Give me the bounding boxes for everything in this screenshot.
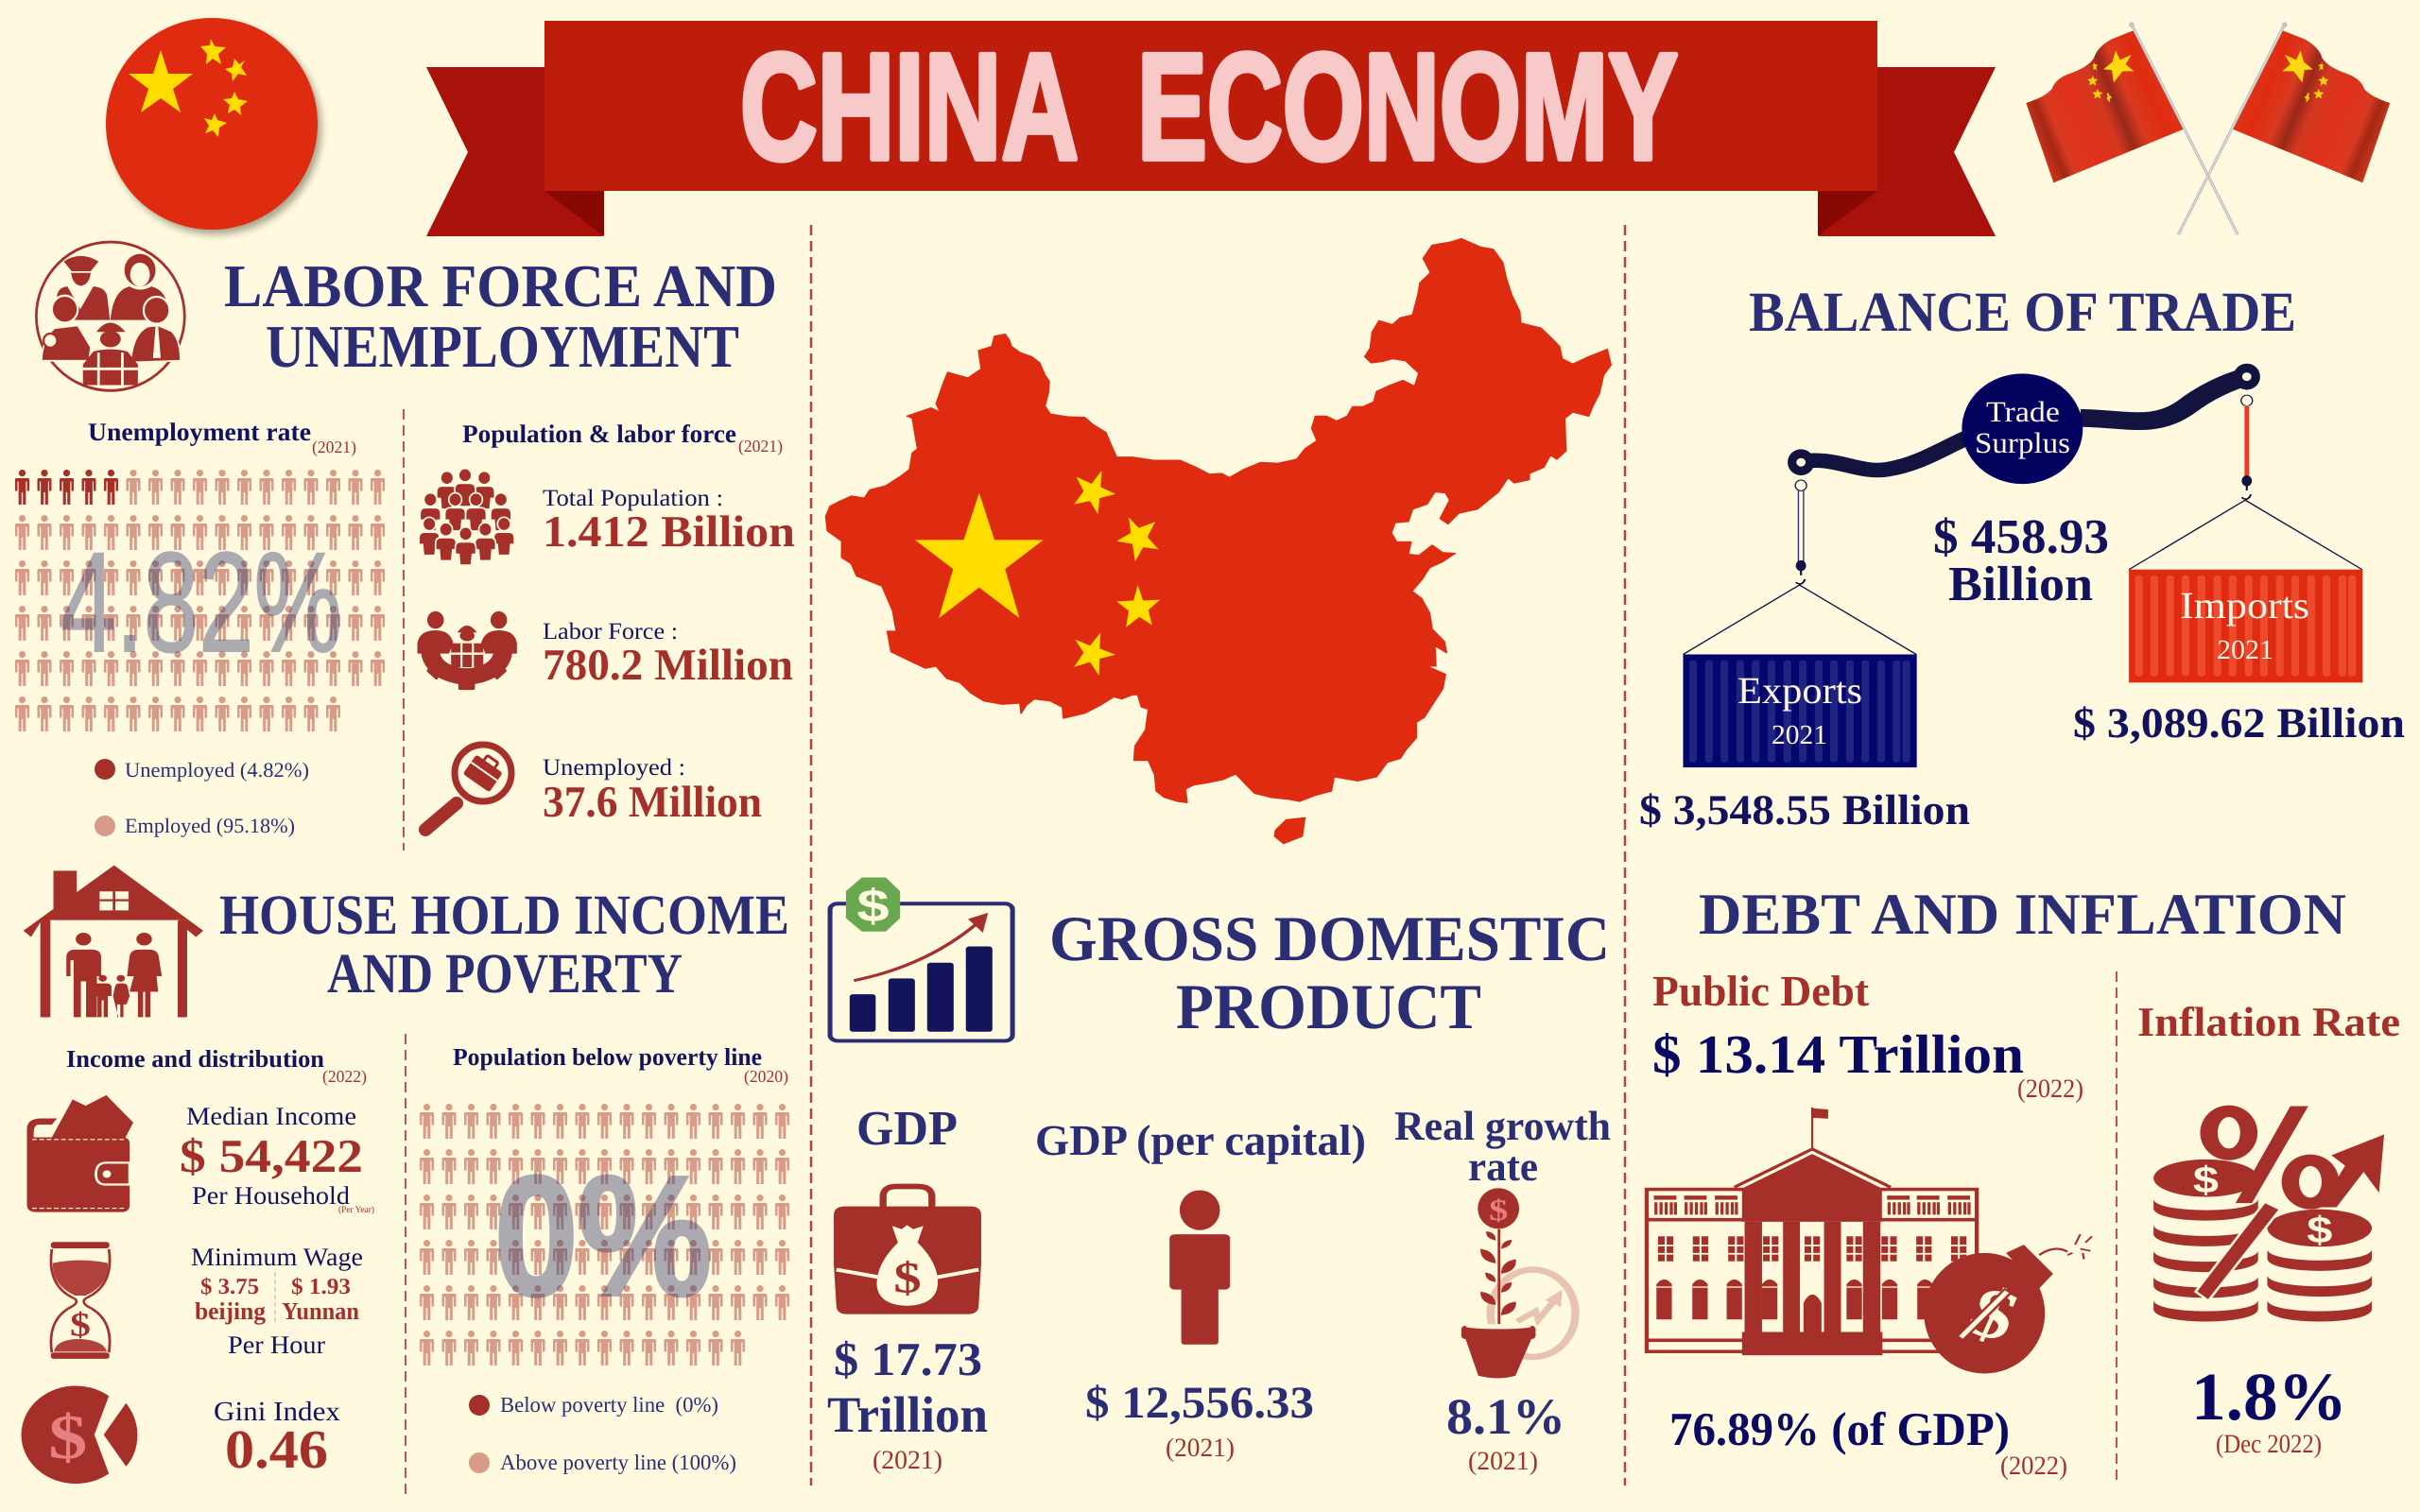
value: GDP per capita: $ 12,556.33 bbox=[1085, 1378, 1314, 1428]
stat: total population bbox=[543, 486, 795, 557]
icon: growth chart with dollar badge: $ bbox=[856, 881, 890, 932]
icon: hourglass bbox=[51, 1242, 110, 1359]
value: trade surplus bbox=[1933, 510, 2109, 611]
icon: government building with bomb: $ bbox=[1957, 1271, 2031, 1357]
value: debt to GDP: (2022) bbox=[2000, 1452, 2067, 1481]
subheading: population below poverty line: Population below poverty line bbox=[453, 1043, 762, 1071]
value: GDP: Trillion bbox=[827, 1386, 988, 1443]
stat: labor force: Labor Force : bbox=[543, 619, 678, 644]
stat: minimum wage: Yunnan bbox=[282, 1297, 360, 1325]
stat: median income: Median Income bbox=[186, 1102, 356, 1130]
heading: GROSS DOMESTIC bbox=[1049, 902, 1610, 974]
icon: briefcase with money bag bbox=[834, 1186, 981, 1314]
icon: magnifier with briefcase bbox=[425, 745, 511, 830]
title: CHINA bbox=[740, 22, 1079, 191]
value: inflation rate: 1.8% bbox=[2191, 1359, 2347, 1435]
label: inflation rate: Inflation Rate bbox=[2137, 999, 2400, 1045]
panel: balance of trade bbox=[1639, 281, 2405, 833]
icon: wallet bbox=[27, 1095, 133, 1212]
heading: UNEMPLOYMENT bbox=[266, 313, 739, 380]
section divider: main left bbox=[810, 225, 812, 1486]
stat: median income: $ 54,422 bbox=[180, 1129, 363, 1182]
value: GDP per capita: (2021) bbox=[1166, 1434, 1235, 1463]
stat: labor force bbox=[543, 619, 793, 690]
legend: above poverty line: Above poverty line (100%) bbox=[500, 1451, 736, 1474]
legend: employed: Employed (95.18%) bbox=[125, 814, 295, 837]
panel: household income and poverty bbox=[22, 866, 789, 1494]
heading: BALANCE OF TRADE bbox=[1749, 281, 2296, 343]
value: trade surplus: Billion bbox=[1948, 558, 2093, 611]
icon: coins with percent and arrow: $ bbox=[2307, 1210, 2332, 1251]
label: trade surplus: Trade bbox=[1986, 395, 2060, 428]
icon: briefcase with money bag: $ bbox=[893, 1253, 922, 1302]
heading: PRODUCT bbox=[1176, 971, 1481, 1042]
icon: person bbox=[1169, 1190, 1230, 1345]
pictogram: unemployment rate bbox=[15, 470, 385, 731]
panel: debt and inflation bbox=[1647, 883, 2400, 1484]
icon: house with family bbox=[24, 866, 203, 1017]
value: GDP: $ 17.73 bbox=[834, 1332, 982, 1385]
icon: round China flag bbox=[106, 18, 318, 230]
stat: gini index bbox=[214, 1397, 341, 1480]
value: public debt bbox=[1652, 1023, 2083, 1104]
icon: government building with bomb bbox=[1647, 1108, 2092, 1374]
value: exports: $ 3,548.55 Billion bbox=[1639, 786, 1970, 833]
value: GDP: (2021) bbox=[873, 1446, 942, 1475]
value: imports: $ 3,089.62 Billion bbox=[2073, 699, 2405, 747]
label: exports bbox=[1737, 669, 1862, 750]
heading bbox=[219, 884, 789, 1005]
label: real growth rate: Real growth bbox=[1394, 1103, 1611, 1149]
stat: minimum wage bbox=[191, 1243, 363, 1359]
subheading: population below poverty line: (2020) bbox=[744, 1067, 788, 1086]
value: trade surplus: $ 458.93 bbox=[1933, 510, 2109, 564]
pictogram: poverty bbox=[420, 1104, 789, 1366]
map of China with flag stars bbox=[826, 239, 1611, 844]
label: trade surplus: Surplus bbox=[1975, 426, 2070, 459]
title ribbon bbox=[426, 21, 1996, 236]
panel: labor force and unemployment bbox=[15, 242, 795, 850]
icon: gini pie coin: $ bbox=[48, 1401, 87, 1472]
label: trade surplus bbox=[1975, 395, 2070, 459]
stat: median income: Per Household bbox=[192, 1181, 351, 1210]
stat: unemployed bbox=[543, 755, 762, 827]
label: real growth rate: rate bbox=[1468, 1143, 1538, 1190]
stat: unemployed: Unemployed : bbox=[543, 755, 685, 781]
stat: total population: Total Population : bbox=[543, 486, 723, 511]
stat: minimum wage: $ 3.75 bbox=[200, 1275, 259, 1299]
icon: hourglass: $ bbox=[70, 1306, 91, 1343]
pictogram: poverty: 0% bbox=[494, 1142, 712, 1332]
stat: labor force: 780.2 Million bbox=[543, 641, 793, 690]
value: growth rate bbox=[1446, 1388, 1565, 1476]
value: public debt: (2022) bbox=[2017, 1074, 2083, 1104]
icon: coins with percent and arrow: $ bbox=[2193, 1160, 2219, 1201]
heading: LABOR FORCE AND bbox=[224, 252, 777, 319]
subheading: population below poverty line bbox=[453, 1043, 788, 1086]
stat: minimum wage: beijing bbox=[195, 1297, 266, 1325]
diagram: trade balance crane bbox=[1683, 364, 2362, 767]
title: ECONOMY bbox=[1137, 22, 1678, 191]
stat: unemployed: 37.6 Million bbox=[543, 778, 762, 827]
label: GDP per capita: GDP (per capital) bbox=[1035, 1116, 1366, 1164]
subheading: unemployment rate bbox=[88, 418, 356, 456]
subheading: population and labor force: Population & labor force bbox=[462, 420, 736, 448]
subheading: population and labor force: (2021) bbox=[738, 437, 783, 455]
subheading: unemployment rate: Unemployment rate bbox=[88, 418, 311, 446]
value: inflation rate: (Dec 2022) bbox=[2216, 1430, 2322, 1459]
icon: money plant bbox=[1461, 1188, 1576, 1378]
stat: gini index: 0.46 bbox=[225, 1418, 328, 1480]
icon: coins with percent and arrow bbox=[2153, 1106, 2384, 1322]
stat: total population: 1.412 Billion bbox=[543, 507, 795, 557]
subheading: unemployment rate: (2021) bbox=[312, 438, 356, 456]
label: imports: Imports bbox=[2180, 584, 2309, 627]
icon: crowd bbox=[419, 469, 514, 565]
pictogram: unemployment rate: 4.82% bbox=[60, 523, 342, 681]
label: imports: 2021 bbox=[2217, 635, 2273, 665]
section divider: main right bbox=[1624, 225, 1626, 1486]
icon: crossed waving flags bbox=[2026, 22, 2390, 234]
icon: workers in circle bbox=[36, 242, 184, 390]
subheading: income and distribution: Income and distribution bbox=[66, 1045, 325, 1073]
stat: minimum wage: Per Hour bbox=[228, 1331, 325, 1359]
label: GDP: GDP bbox=[856, 1102, 958, 1156]
icon: growth chart with dollar badge bbox=[830, 877, 1012, 1040]
value: debt to GDP: 76.89% (of GDP) bbox=[1669, 1402, 2010, 1455]
heading bbox=[224, 252, 777, 380]
heading: AND POVERTY bbox=[327, 942, 683, 1005]
panel: gross domestic product bbox=[827, 877, 1611, 1476]
icon: gini pie coin bbox=[22, 1385, 137, 1484]
stat: minimum wage: $ 1.93 bbox=[291, 1275, 351, 1299]
heading: DEBT AND INFLATION bbox=[1699, 883, 2346, 947]
stat: minimum wage: Minimum Wage bbox=[191, 1243, 363, 1271]
label: imports bbox=[2180, 584, 2309, 665]
value: GDP bbox=[827, 1332, 988, 1475]
value: public debt: $ 13.14 Trillion bbox=[1652, 1023, 2024, 1085]
icon: labor force gear bbox=[418, 611, 517, 690]
legend: unemployed: Unemployed (4.82%) bbox=[125, 758, 309, 782]
label: exports: 2021 bbox=[1772, 720, 1827, 750]
subheading: income and distribution bbox=[66, 1045, 367, 1086]
heading bbox=[1049, 902, 1610, 1042]
stat: gini index: Gini Index bbox=[214, 1397, 341, 1427]
legend: below poverty line: Below poverty line (0%) bbox=[500, 1393, 718, 1417]
subheading: income and distribution: (2022) bbox=[322, 1067, 367, 1086]
icon: money plant: $ bbox=[1489, 1194, 1508, 1227]
label: real growth rate bbox=[1394, 1103, 1611, 1190]
stat: median income: (Per Year) bbox=[338, 1205, 374, 1215]
label: exports: Exports bbox=[1737, 669, 1862, 712]
label: public debt: Public Debt bbox=[1652, 967, 1870, 1015]
value: growth rate: (2021) bbox=[1468, 1447, 1538, 1476]
subheading: population and labor force bbox=[462, 420, 783, 455]
title bbox=[740, 22, 1678, 191]
stat: median income bbox=[180, 1102, 374, 1215]
heading: HOUSE HOLD INCOME bbox=[219, 884, 789, 946]
value: GDP per capita bbox=[1085, 1378, 1314, 1463]
value: debt to GDP bbox=[1669, 1402, 2067, 1481]
value: growth rate: 8.1% bbox=[1446, 1388, 1565, 1445]
